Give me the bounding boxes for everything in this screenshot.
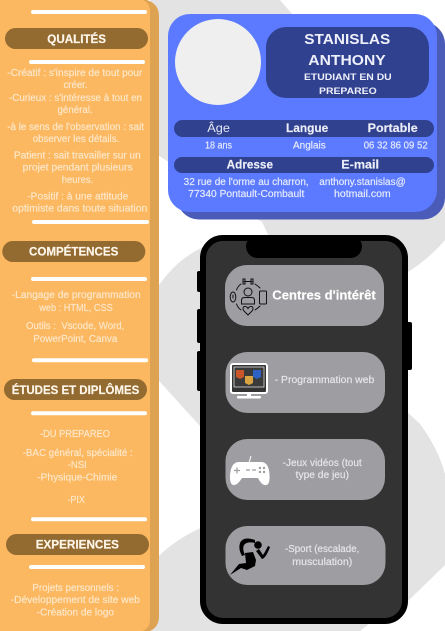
qualities text: général. (58, 105, 93, 116)
pill: centres d'intérêt (225, 265, 384, 326)
skills text: PowerPoint, Canva (33, 334, 118, 345)
studies text (23, 429, 133, 506)
icon: interests (230, 279, 266, 315)
icon: runner (230, 539, 270, 575)
pill: centres d'intérêt: Centres d'intérêt (272, 289, 377, 303)
qualities text: -Positif : à une attitude (27, 192, 129, 203)
studies text: -BAC général, spécialité : (23, 448, 133, 459)
qualities text: heures. (62, 175, 93, 186)
info row 2: hotmail.com (334, 189, 391, 200)
pill: jeux vidéos: type de jeu) (296, 470, 349, 481)
heading: experiences: EXPERIENCES (36, 538, 119, 552)
qualities text: -à le sens de l'observation : sait (7, 122, 144, 133)
info row 1: 06 32 86 09 52 (364, 141, 428, 152)
pill: sport (226, 526, 386, 585)
info row 1: 18 ans (205, 141, 232, 152)
sidebar (0, 0, 159, 631)
info row 2: 32 rue de l'orme au charron, (184, 177, 309, 188)
experience text: Projets personnels : (32, 583, 119, 594)
section: experiences (6, 534, 149, 619)
section: qualités (5, 10, 149, 224)
heading: compétences: COMPÉTENCES (29, 244, 118, 259)
studies text: -PIX (67, 495, 85, 506)
info row 1: Anglais (293, 141, 326, 152)
heading: qualités: QUALITÉS (47, 31, 106, 46)
info row 2: E-mail (341, 160, 379, 172)
experience text (11, 583, 141, 619)
name block: STANISLAS (304, 32, 391, 48)
skills text: -Langage de programmation (12, 290, 141, 301)
name block: ETUDIANT EN DU (304, 72, 392, 83)
pill: jeux vidéos (226, 439, 385, 500)
heading: compétences (2, 241, 145, 262)
experience text: -Création de logo (37, 608, 115, 619)
qualities text: optimiste dans toute situation (12, 204, 147, 215)
qualities text: observer les détails. (33, 134, 119, 145)
heading: études et diplômes (4, 379, 147, 400)
pill: jeux vidéos: -Jeux vidéos (tout (283, 458, 362, 469)
skills text: web : HTML, CSS (38, 303, 113, 314)
section: études (4, 379, 147, 521)
studies text: -DU PREPAREO (40, 429, 110, 440)
icon: monitor (231, 364, 267, 398)
pill: programmation (226, 352, 385, 413)
profile card (168, 14, 445, 220)
info row 2 (174, 157, 434, 200)
info row 1: Portable (368, 123, 418, 135)
photo placeholder (175, 19, 261, 105)
name block (266, 27, 429, 98)
name block: ANTHONY (308, 53, 386, 69)
qualities text: -Créatif : s'inspire de tout pour (7, 68, 143, 79)
info row 2: 77340 Pontault-Combault (188, 189, 305, 200)
heading: études et diplômes: ÉTUDES ET DIPLÔMES (12, 382, 139, 397)
qualities text (7, 68, 147, 215)
skills text: Outils : Vscode, Word, (26, 321, 124, 332)
heading: experiences (6, 534, 149, 555)
name block: PREPAREO (319, 86, 377, 97)
skills text (12, 290, 141, 345)
section: compétences (2, 241, 148, 362)
info row 2: anthony.stanislas@ (319, 177, 406, 188)
qualities text: projet pendant plusieurs (23, 163, 133, 174)
pill: sport: musculation) (292, 557, 352, 568)
pill: programmation: - Programmation web (275, 375, 375, 386)
studies text: -Physique-Chimie (37, 473, 118, 484)
qualities text: Patient : sait travailler sur un (14, 151, 141, 162)
phone (197, 235, 412, 621)
pill: sport: -Sport (escalade, (285, 544, 359, 555)
icon: game controller (230, 456, 270, 485)
info row 1: Âge (207, 122, 230, 135)
info row 2: Adresse (227, 160, 273, 172)
studies text: -NSI (68, 460, 87, 471)
experience text: -Développement de site web (11, 595, 141, 606)
heading: qualités (5, 28, 148, 49)
info row 1 (174, 120, 434, 152)
info row 1: Langue (286, 123, 328, 135)
qualities text: créer. (64, 80, 88, 91)
background shapes (150, 0, 445, 631)
qualities text: -Curieux : s'intéresse à tout en (9, 93, 142, 104)
